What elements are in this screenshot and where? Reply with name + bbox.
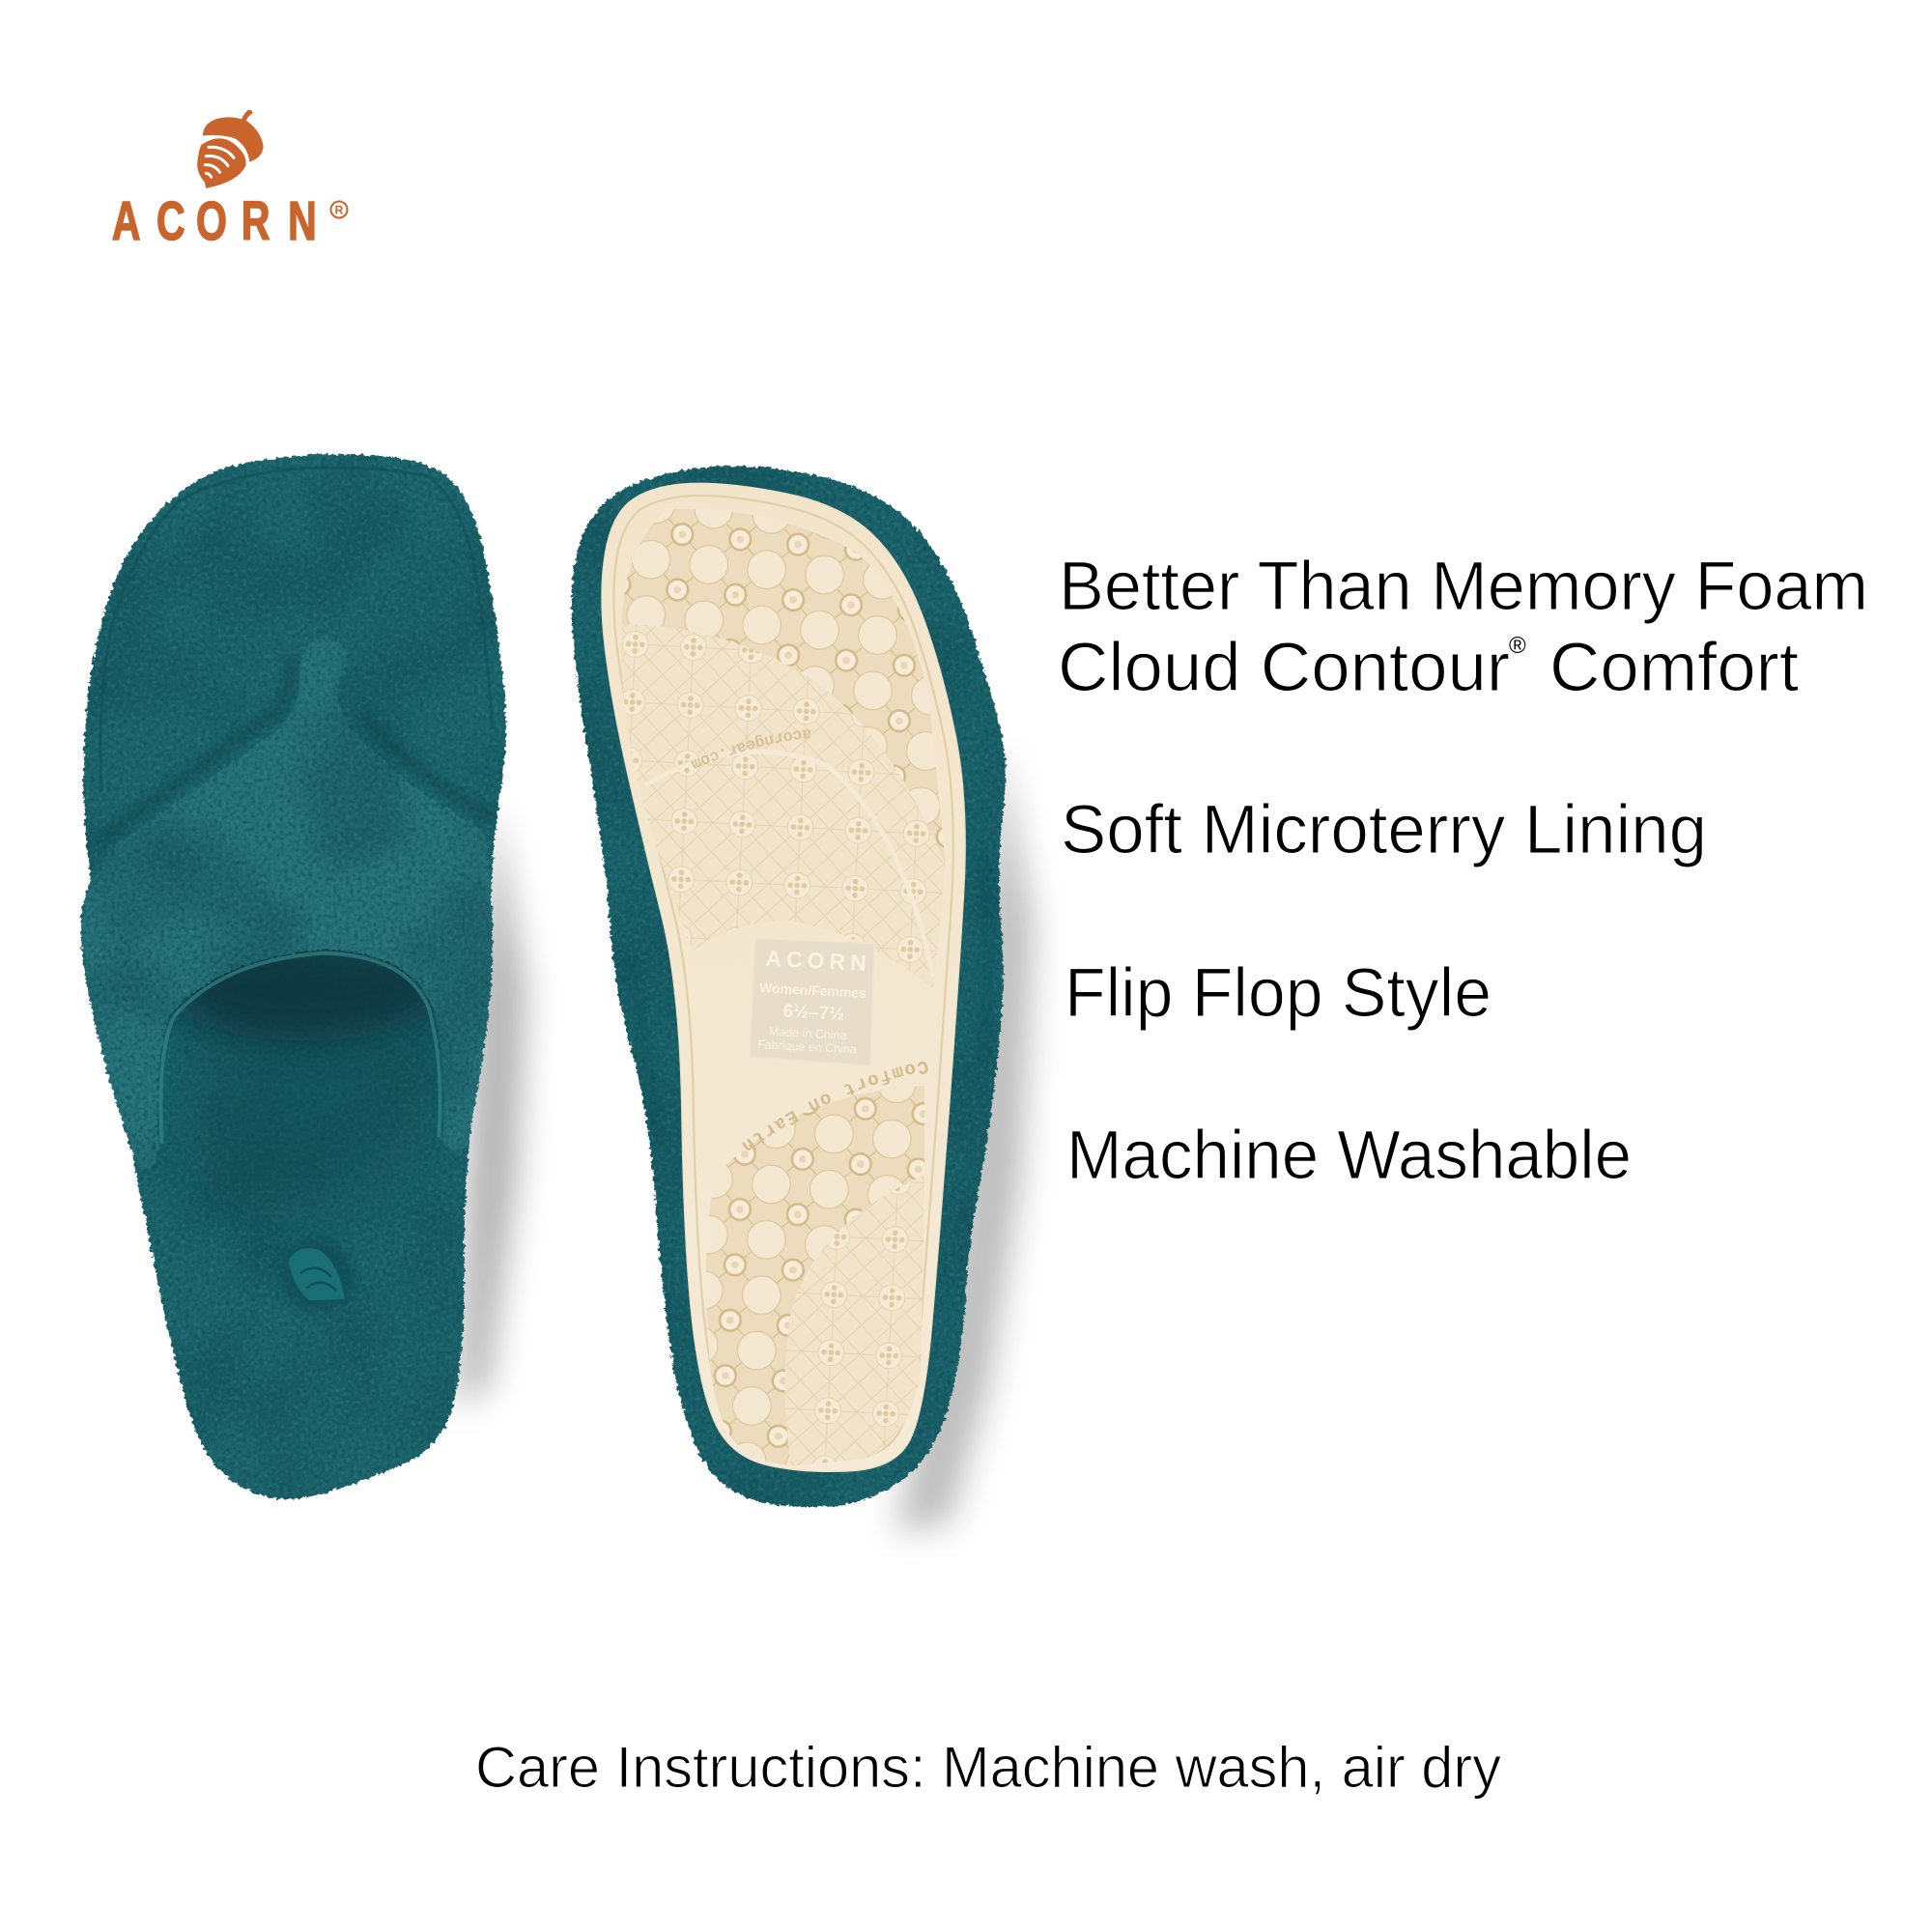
thong strap (80, 638, 493, 1170)
feature: Cloud Contour Comfort (1058, 630, 1799, 706)
terry fold shading (628, 853, 987, 1150)
size tag on sole (750, 938, 874, 1065)
tread divider arc (645, 752, 933, 977)
strap inner rim (161, 953, 440, 1144)
logo wordmark: ACORN (112, 189, 317, 252)
size tag text: Women/Femmes (759, 980, 867, 1001)
embossed Comfort on Earth text: Comfort on Earth (742, 1061, 927, 1151)
acorn emblem glow (279, 1241, 354, 1310)
feature: Better Than Memory Foam: Better Than Memory Foam (1059, 549, 1868, 625)
size tag text (756, 945, 871, 1057)
heel circle tread (706, 1086, 924, 1466)
feature: Cloud Contour Comfort: Cloud Contour (1058, 630, 1510, 706)
logo: Acorn (112, 110, 348, 252)
rubber sole (602, 483, 965, 1471)
feature: Flip Flop Style: Flip Flop Style (1065, 955, 1492, 1032)
icon: acorn (197, 110, 264, 188)
embroidered acorn emblem (287, 1247, 346, 1302)
forefoot lattice tread (621, 624, 946, 989)
forefoot circle tread (622, 509, 946, 866)
strap cast shadow and opening shadow (99, 655, 497, 1224)
care instructions: Care Instructions: Machine wash, air dry (475, 1735, 1501, 1800)
logo registered mark (330, 201, 348, 218)
right slipper: sole view (570, 465, 1007, 1509)
feature: Soft Microterry Lining: Soft Microterry Lining (1061, 792, 1707, 868)
embossed acorngear.com text: acorngear.com (691, 729, 810, 769)
sole inner ridge (613, 496, 953, 1460)
left slipper: top view (80, 454, 506, 1499)
size tag text: 6½–7½ (782, 1001, 844, 1025)
feature: Cloud Contour Comfort: ® (1509, 633, 1526, 659)
feature: Machine Washable: Machine Washable (1066, 1118, 1632, 1194)
slipper shadows (457, 742, 1034, 1533)
feature: Cloud Contour Comfort: Comfort (1549, 630, 1799, 706)
heel lattice tread (785, 1175, 924, 1466)
logo registered mark: R (335, 203, 344, 216)
toe stitching (100, 468, 492, 791)
size tag text: Made in China (769, 1025, 847, 1042)
terry upper edge (572, 466, 1006, 1507)
size tag text: Fabriqué en China (757, 1037, 857, 1057)
size tag panel (750, 938, 874, 1065)
slipper footbed (83, 454, 506, 1499)
size tag text: ACORN (765, 945, 871, 976)
feature list (1058, 549, 1868, 1194)
